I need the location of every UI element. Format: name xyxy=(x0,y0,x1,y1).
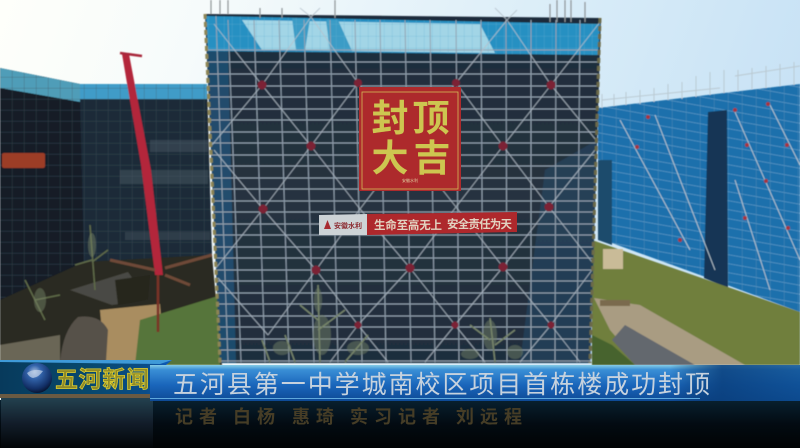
top safety mesh band xyxy=(206,16,600,55)
red topping-out banner xyxy=(359,87,461,191)
safety slogan banner xyxy=(319,212,517,235)
reporter credits: 惠琦 xyxy=(292,407,334,427)
red concrete pump boom xyxy=(110,53,212,332)
left and right scaffold edges xyxy=(205,14,220,363)
red topping-out banner: 大 xyxy=(372,138,408,179)
blue netting at left edge xyxy=(207,50,236,363)
main building with scaffold xyxy=(205,0,601,363)
red topping-out banner: 吉 xyxy=(414,138,450,179)
red topping-out banner: 顶 xyxy=(412,98,450,139)
ground and debris xyxy=(0,240,800,365)
lower third background xyxy=(0,394,800,448)
reporter credits: 记者 xyxy=(175,407,217,427)
news title bar xyxy=(150,365,800,401)
red topping-out banner: 封 xyxy=(372,98,408,139)
program logo: Wuhe News: 五河新闻 xyxy=(55,366,149,392)
diagonal braces xyxy=(212,8,600,362)
blue netting lower right xyxy=(520,140,597,363)
red brace joints xyxy=(258,79,556,328)
safety slogan banner: 安徽水利 xyxy=(334,221,362,230)
reporter credits: 实习记者 xyxy=(350,406,440,427)
reporter credits: 白杨 xyxy=(233,407,275,427)
reporter credits: 刘远程 xyxy=(456,407,522,427)
left building with scaffolding xyxy=(0,68,212,305)
program logo: Wuhe News xyxy=(0,360,172,394)
scaffold bars xyxy=(208,16,598,362)
reporter credits xyxy=(175,406,522,427)
red topping-out banner: 安徽水利 xyxy=(402,177,418,183)
safety slogan banner: 安全责任为天 xyxy=(447,217,512,231)
foreground shrubs xyxy=(25,225,523,362)
right building with blue scaffolding xyxy=(598,62,800,312)
safety slogan banner: 生命至高无上 xyxy=(374,218,442,232)
news title bar: 五河县第一中学城南校区项目首栋楼成功封顶 xyxy=(173,371,710,399)
icon: globe xyxy=(22,363,52,393)
